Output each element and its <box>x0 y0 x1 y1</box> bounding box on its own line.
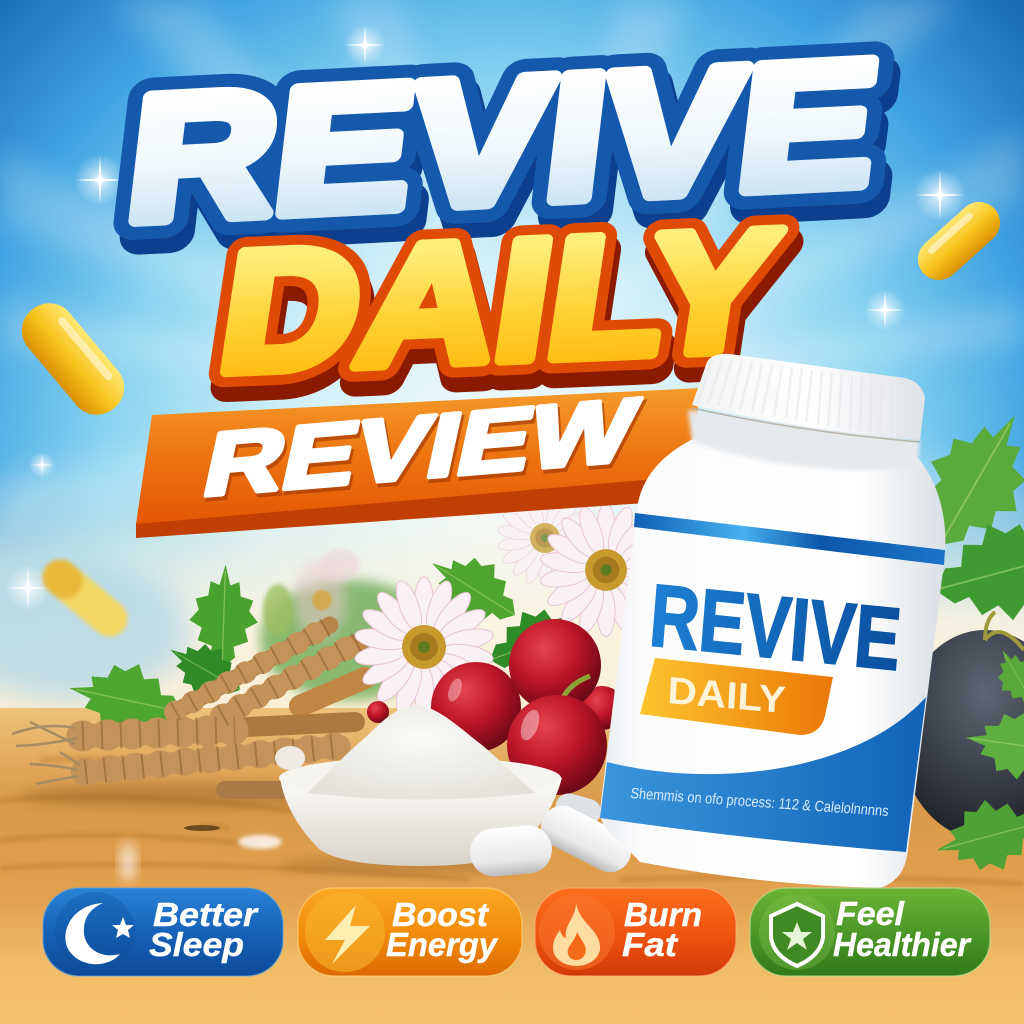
benefit pill: Boost Energy: Energy <box>386 926 499 963</box>
title: REVIVE: REVIVE <box>125 37 894 273</box>
benefit pill: Burn Fat: Fat <box>622 926 679 963</box>
logo: REVIVE: REVIVE <box>646 565 904 689</box>
benefit pill: Better Sleep: Sleep <box>149 926 244 963</box>
flowers <box>353 490 673 717</box>
label badge <box>640 658 833 735</box>
title: REVIVE: REVIVE <box>118 22 888 258</box>
benefit pill: Feel Healthier: Feel <box>836 895 905 932</box>
floating capsule: top right <box>909 193 1009 289</box>
benefit pill: Better Sleep <box>43 888 283 976</box>
label swoosh <box>600 697 926 852</box>
powder bowl <box>275 705 562 873</box>
benefit pill: Burn Fat <box>535 888 736 976</box>
label stripe <box>634 513 945 565</box>
cherries <box>367 619 624 795</box>
icon: shield with star <box>771 904 823 966</box>
roots <box>12 625 365 790</box>
title: DAILY: DAILY <box>211 206 793 422</box>
icon: moon and star <box>65 903 134 964</box>
plum <box>900 612 1024 885</box>
title: DAILY: DAILY <box>208 192 790 409</box>
label badge: DAILY <box>667 670 787 722</box>
benefit pill: Burn Fat: Burn <box>624 896 702 933</box>
benefit pill: Feel Healthier <box>750 888 990 976</box>
bottle body <box>600 438 945 888</box>
bottle <box>600 354 945 888</box>
benefit pill: Feel Healthier: Healthier <box>833 926 972 963</box>
label fine print: Shemmis on ofo process: 112 & Calelolnnnns <box>630 785 890 820</box>
benefit pill: Boost Energy: Boost <box>392 896 490 933</box>
right leaves <box>897 391 1024 638</box>
title: REVIEW: REVIEW <box>195 379 645 516</box>
floating capsule: blurred <box>35 552 135 644</box>
title: REVIVE: REVIVE <box>118 22 888 258</box>
icon: flame <box>553 903 600 966</box>
bottle cap <box>692 354 925 442</box>
white capsules <box>468 791 638 880</box>
plant leaves, left cluster <box>62 536 599 749</box>
benefit pill: Boost Energy <box>298 888 522 976</box>
orange ribbon <box>136 388 700 538</box>
icon: lightning bolt <box>325 905 370 964</box>
floating capsule: left <box>11 293 135 425</box>
benefit pill: Better Sleep: Better <box>153 896 259 933</box>
title: REVIEW: REVIEW <box>197 383 647 519</box>
title: DAILY: DAILY <box>208 192 790 409</box>
wooden table <box>0 708 1024 1024</box>
